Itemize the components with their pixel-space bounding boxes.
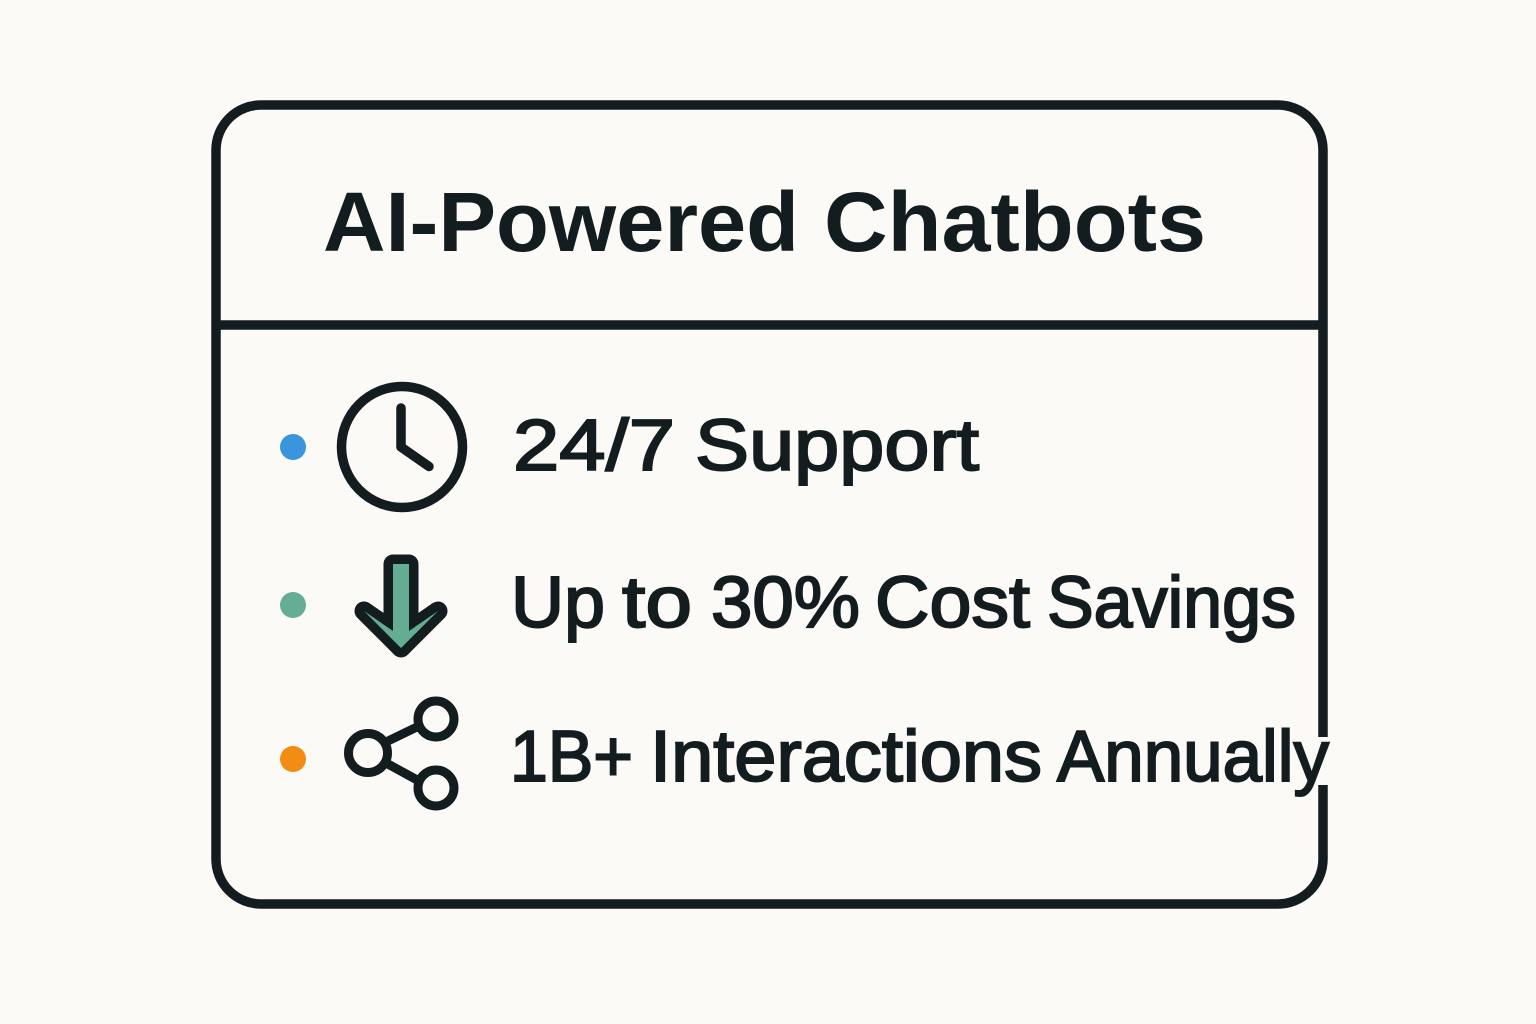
panel: chatbot card bbox=[216, 105, 1329, 904]
label: cost savings: to bbox=[622, 563, 692, 643]
label: cost savings: Savings bbox=[1047, 563, 1296, 643]
row: cost savings bbox=[280, 563, 1296, 648]
label: 24/7 support: 24/7 bbox=[513, 406, 675, 486]
icon: share network bbox=[348, 701, 454, 806]
label: interactions: Interactions bbox=[650, 717, 1042, 797]
label: 24/7 support: Support bbox=[695, 406, 979, 486]
title: AI-Powered bbox=[323, 175, 799, 269]
icon: clock bbox=[342, 386, 462, 508]
label: cost savings: Cost bbox=[875, 563, 1030, 643]
label: cost savings: Up bbox=[511, 563, 605, 643]
bullet: green bbox=[280, 592, 306, 618]
row: interactions bbox=[280, 701, 1329, 806]
label: interactions: Annually bbox=[1057, 717, 1329, 797]
label: interactions bbox=[510, 717, 1329, 797]
label: 24/7 support bbox=[513, 406, 979, 486]
bullet: blue bbox=[280, 434, 306, 460]
bullet: orange bbox=[280, 746, 306, 772]
card border bbox=[216, 105, 1323, 904]
title bbox=[323, 175, 1206, 269]
row: 24/7 support bbox=[280, 386, 979, 508]
label: cost savings: 30% bbox=[711, 563, 860, 643]
title: Chatbots bbox=[824, 175, 1206, 269]
header divider bbox=[216, 320, 1323, 330]
label: interactions: 1B+ bbox=[510, 717, 633, 797]
icon: down arrow bbox=[364, 564, 438, 648]
label: cost savings bbox=[511, 563, 1296, 643]
